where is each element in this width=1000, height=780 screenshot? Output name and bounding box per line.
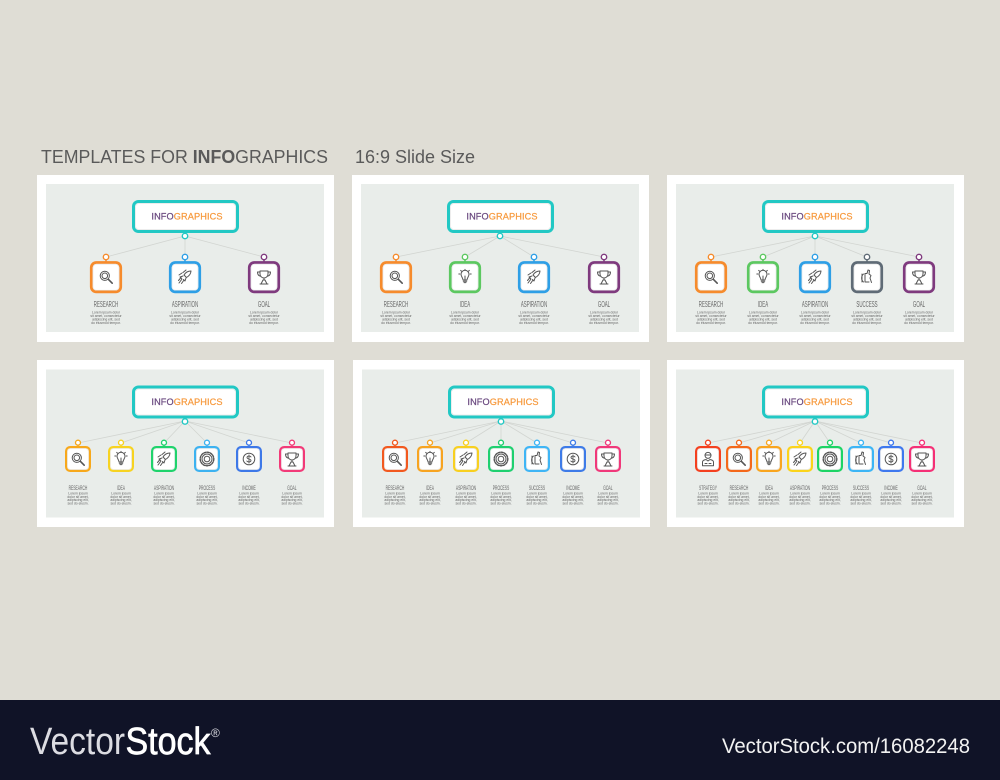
card: research: adipiscing elit, sed bbox=[697, 318, 725, 322]
card: income: dolor sit amet, bbox=[238, 495, 260, 499]
footer bar bbox=[0, 700, 1000, 780]
card: process: adipiscing elit, bbox=[490, 498, 512, 502]
card: goal: do eiusmod tempor. bbox=[589, 321, 619, 325]
card: success: adipiscing elit, bbox=[850, 498, 872, 502]
card: research: do eiusmod tempor. bbox=[91, 321, 121, 325]
card: goal: GOAL bbox=[598, 301, 610, 309]
card: success: do eiusmod tempor. bbox=[852, 321, 882, 325]
card: goal: Lorem ipsum dolor bbox=[590, 310, 619, 314]
card: aspiration: Lorem ipsum bbox=[154, 492, 174, 496]
card: idea: adipiscing elit, sed bbox=[451, 318, 479, 322]
card: process bbox=[818, 440, 842, 505]
card: aspiration: dolor sit amet, bbox=[455, 495, 477, 499]
card: aspiration: sed do eiusm. bbox=[153, 501, 175, 505]
card: research: sed do eiusm. bbox=[67, 501, 89, 505]
hub node bbox=[812, 233, 818, 239]
card: idea: do eiusmod tempor. bbox=[450, 321, 480, 325]
card: idea: sit amet, consectetur bbox=[747, 314, 780, 318]
hub node bbox=[498, 419, 504, 424]
card: idea: adipiscing elit, sed bbox=[749, 318, 777, 322]
panel: seven items bbox=[353, 360, 650, 527]
card: aspiration: adipiscing elit, bbox=[455, 498, 477, 502]
card: process: PROCESS bbox=[493, 485, 510, 493]
card: aspiration bbox=[799, 254, 832, 325]
card: success: SUCCESS bbox=[856, 301, 878, 309]
card: success: Lorem ipsum bbox=[851, 492, 871, 496]
card: income: Lorem ipsum bbox=[239, 492, 259, 496]
card: goal: GOAL bbox=[258, 301, 270, 309]
card: success: SUCCESS bbox=[853, 485, 870, 493]
card: goal: Lorem ipsum bbox=[912, 492, 932, 496]
card: goal: sit amet, consectetur bbox=[248, 314, 281, 318]
header box: INFOGRAPHICS bbox=[151, 212, 223, 222]
card: research: do eiusmod tempor. bbox=[696, 321, 726, 325]
panel: three items bbox=[37, 175, 334, 342]
card: aspiration bbox=[169, 254, 202, 325]
card: goal: Lorem ipsum bbox=[282, 492, 302, 496]
card: process: Lorem ipsum bbox=[820, 492, 840, 496]
card: process: sed do eiusm. bbox=[196, 501, 218, 505]
card: aspiration: adipiscing elit, sed bbox=[801, 318, 829, 322]
hub node bbox=[812, 419, 818, 424]
card: idea: adipiscing elit, bbox=[419, 498, 441, 502]
card: idea bbox=[109, 440, 133, 505]
card: research: sit amet, consectetur bbox=[90, 314, 123, 318]
card: idea: sed do eiusm. bbox=[758, 501, 780, 505]
card: income: dolor sit amet, bbox=[562, 495, 584, 499]
card: success bbox=[849, 440, 873, 505]
card: idea: IDEA bbox=[117, 485, 125, 493]
card: goal: GOAL bbox=[603, 485, 613, 493]
card: idea: do eiusmod tempor. bbox=[748, 321, 778, 325]
card: strategy: dolor sit amet, bbox=[697, 495, 719, 499]
card: research: RESEARCH bbox=[94, 301, 118, 309]
card: process: dolor sit amet, bbox=[490, 495, 512, 499]
card: aspiration bbox=[454, 440, 478, 505]
footer id text: VectorStock.com/16082248 bbox=[722, 735, 970, 758]
card: process bbox=[195, 440, 219, 505]
header box bbox=[764, 387, 868, 417]
card: idea: adipiscing elit, bbox=[110, 498, 132, 502]
card: goal: dolor sit amet, bbox=[597, 495, 619, 499]
card: idea: sed do eiusm. bbox=[419, 501, 441, 505]
card: success bbox=[525, 440, 549, 505]
hub node bbox=[182, 419, 188, 424]
card: income: sed do eiusm. bbox=[238, 501, 260, 505]
card: aspiration: sit amet, consectetur bbox=[518, 314, 551, 318]
card: income: INCOME bbox=[566, 485, 580, 493]
card: success: adipiscing elit, sed bbox=[853, 318, 881, 322]
card: idea bbox=[747, 254, 780, 325]
card: strategy bbox=[696, 440, 720, 505]
card: process bbox=[489, 440, 513, 505]
title: templates for infographics: TEMPLATES FOR INFOGRAPHICS bbox=[41, 146, 328, 167]
card: goal: do eiusmod tempor. bbox=[904, 321, 934, 325]
panel: eight items bbox=[667, 360, 964, 527]
card: strategy: STRATEGY bbox=[699, 485, 717, 493]
card: research bbox=[66, 440, 90, 505]
card: goal: sed do eiusm. bbox=[281, 501, 303, 505]
card: idea: Lorem ipsum dolor bbox=[749, 310, 778, 314]
card: aspiration: sit amet, consectetur bbox=[799, 314, 832, 318]
card: success: sed do eiusm. bbox=[526, 501, 548, 505]
card: income: Lorem ipsum bbox=[563, 492, 583, 496]
card: aspiration bbox=[152, 440, 176, 505]
card: research: Lorem ipsum dolor bbox=[697, 310, 726, 314]
card: aspiration: do eiusmod tempor. bbox=[170, 321, 200, 325]
card: research: RESEARCH bbox=[384, 301, 408, 309]
card: process: dolor sit amet, bbox=[196, 495, 218, 499]
panel: six items bbox=[37, 360, 334, 527]
card: research bbox=[380, 254, 413, 325]
card: aspiration: ASPIRATION bbox=[154, 485, 174, 493]
card: strategy: sed do eiusm. bbox=[697, 501, 719, 505]
card: income: adipiscing elit, bbox=[880, 498, 902, 502]
card: aspiration: ASPIRATION bbox=[521, 301, 547, 309]
card: research: dolor sit amet, bbox=[67, 495, 89, 499]
logo: VectorStock: Vector bbox=[30, 721, 125, 763]
card: process: adipiscing elit, bbox=[819, 498, 841, 502]
card: success: sit amet, consectetur bbox=[851, 314, 884, 318]
card: goal: adipiscing elit, bbox=[597, 498, 619, 502]
card: success bbox=[851, 254, 884, 325]
card: research: do eiusmod tempor. bbox=[381, 321, 411, 325]
card: process: Lorem ipsum bbox=[197, 492, 217, 496]
card: goal bbox=[596, 440, 620, 505]
card: process: sed do eiusm. bbox=[819, 501, 841, 505]
card: income: sed do eiusm. bbox=[880, 501, 902, 505]
card: success: adipiscing elit, bbox=[526, 498, 548, 502]
card: idea: sit amet, consectetur bbox=[449, 314, 482, 318]
logo: VectorStock: ® bbox=[211, 726, 220, 740]
card: aspiration: Lorem ipsum dolor bbox=[171, 310, 200, 314]
card: idea bbox=[449, 254, 482, 325]
card: research: adipiscing elit, bbox=[67, 498, 89, 502]
card: goal: do eiusmod tempor. bbox=[249, 321, 279, 325]
card: success: Lorem ipsum dolor bbox=[853, 310, 882, 314]
card: research: RESEARCH bbox=[699, 301, 723, 309]
card: goal: sed do eiusm. bbox=[597, 501, 619, 505]
card: research: sit amet, consectetur bbox=[695, 314, 728, 318]
card: idea: dolor sit amet, bbox=[110, 495, 132, 499]
card: aspiration: ASPIRATION bbox=[172, 301, 198, 309]
card: process: sed do eiusm. bbox=[490, 501, 512, 505]
panel: four items bbox=[352, 175, 649, 342]
header box: INFOGRAPHICS bbox=[466, 212, 538, 222]
card: income: Lorem ipsum bbox=[881, 492, 901, 496]
card: aspiration: ASPIRATION bbox=[802, 301, 828, 309]
card: idea: sed do eiusm. bbox=[110, 501, 132, 505]
card: idea bbox=[757, 440, 781, 505]
card: income bbox=[237, 440, 261, 505]
card: success: dolor sit amet, bbox=[526, 495, 548, 499]
header box bbox=[134, 387, 238, 417]
card: goal: sit amet, consectetur bbox=[588, 314, 621, 318]
card: idea: IDEA bbox=[765, 485, 773, 493]
panel: five items bbox=[667, 175, 964, 342]
card: research: adipiscing elit, sed bbox=[382, 318, 410, 322]
hub node bbox=[497, 233, 503, 239]
card: research: RESEARCH bbox=[730, 485, 749, 493]
card: income: adipiscing elit, bbox=[238, 498, 260, 502]
header box: INFOGRAPHICS bbox=[151, 397, 223, 407]
card: idea: IDEA bbox=[758, 301, 769, 309]
card: research: Lorem ipsum dolor bbox=[382, 310, 411, 314]
card: research: dolor sit amet, bbox=[728, 495, 750, 499]
card: aspiration: sed do eiusm. bbox=[455, 501, 477, 505]
card: process: adipiscing elit, bbox=[196, 498, 218, 502]
header box bbox=[764, 202, 868, 232]
card: idea: Lorem ipsum bbox=[420, 492, 440, 496]
header box bbox=[448, 202, 552, 232]
card: goal bbox=[588, 254, 621, 325]
card: idea: dolor sit amet, bbox=[758, 495, 780, 499]
card: research: Lorem ipsum bbox=[385, 492, 405, 496]
header box bbox=[134, 202, 238, 232]
card: aspiration: Lorem ipsum dolor bbox=[520, 310, 549, 314]
card: goal: Lorem ipsum bbox=[598, 492, 618, 496]
card: goal: adipiscing elit, sed bbox=[590, 318, 618, 322]
card: goal: GOAL bbox=[287, 485, 297, 493]
header box: INFOGRAPHICS bbox=[467, 397, 539, 407]
card: goal: dolor sit amet, bbox=[911, 495, 933, 499]
card: research: Lorem ipsum dolor bbox=[92, 310, 121, 314]
card: research: dolor sit amet, bbox=[384, 495, 406, 499]
card: aspiration: Lorem ipsum dolor bbox=[801, 310, 830, 314]
card: strategy: adipiscing elit, bbox=[697, 498, 719, 502]
card: goal: Lorem ipsum dolor bbox=[250, 310, 279, 314]
card: aspiration: adipiscing elit, bbox=[153, 498, 175, 502]
card: goal bbox=[280, 440, 304, 505]
card: income: sed do eiusm. bbox=[562, 501, 584, 505]
card: income: adipiscing elit, bbox=[562, 498, 584, 502]
card: idea: IDEA bbox=[426, 485, 434, 493]
card: goal bbox=[910, 440, 934, 505]
card: research bbox=[383, 440, 407, 505]
card: research: sed do eiusm. bbox=[384, 501, 406, 505]
card: aspiration: Lorem ipsum bbox=[456, 492, 476, 496]
card: goal: GOAL bbox=[917, 485, 927, 493]
card: idea: Lorem ipsum bbox=[759, 492, 779, 496]
card: aspiration: do eiusmod tempor. bbox=[519, 321, 549, 325]
card: success: sed do eiusm. bbox=[850, 501, 872, 505]
card: goal: GOAL bbox=[913, 301, 925, 309]
subtitle: slide size: 16:9 Slide Size bbox=[355, 146, 475, 167]
card: goal: adipiscing elit, bbox=[911, 498, 933, 502]
card: idea: IDEA bbox=[460, 301, 471, 309]
card: goal: adipiscing elit, sed bbox=[250, 318, 278, 322]
logo: VectorStock bbox=[30, 721, 220, 763]
card: process: Lorem ipsum bbox=[491, 492, 511, 496]
card: aspiration: Lorem ipsum bbox=[790, 492, 810, 496]
card: aspiration: adipiscing elit, sed bbox=[171, 318, 199, 322]
card: success: Lorem ipsum bbox=[527, 492, 547, 496]
card: aspiration: sit amet, consectetur bbox=[169, 314, 202, 318]
card: idea: dolor sit amet, bbox=[419, 495, 441, 499]
card: aspiration bbox=[788, 440, 812, 505]
card: income bbox=[561, 440, 585, 505]
hub node bbox=[182, 233, 188, 239]
card: aspiration bbox=[518, 254, 551, 325]
card: income: INCOME bbox=[884, 485, 898, 493]
card: idea: Lorem ipsum dolor bbox=[451, 310, 480, 314]
header box bbox=[450, 387, 554, 417]
card: aspiration: ASPIRATION bbox=[790, 485, 810, 493]
card: research: sed do eiusm. bbox=[728, 501, 750, 505]
card: process: PROCESS bbox=[822, 485, 839, 493]
card: research: Lorem ipsum bbox=[68, 492, 88, 496]
card: goal bbox=[248, 254, 281, 325]
card: success: dolor sit amet, bbox=[850, 495, 872, 499]
header box: INFOGRAPHICS bbox=[781, 212, 853, 222]
card: process: PROCESS bbox=[199, 485, 216, 493]
card: idea: adipiscing elit, bbox=[758, 498, 780, 502]
card: idea bbox=[418, 440, 442, 505]
header box: INFOGRAPHICS bbox=[781, 397, 853, 407]
card: research: RESEARCH bbox=[69, 485, 88, 493]
card: research: RESEARCH bbox=[386, 485, 405, 493]
card: research bbox=[90, 254, 123, 325]
card: income: dolor sit amet, bbox=[880, 495, 902, 499]
card: income: INCOME bbox=[242, 485, 256, 493]
card: goal: Lorem ipsum dolor bbox=[905, 310, 934, 314]
card: strategy: Lorem ipsum bbox=[698, 492, 718, 496]
card: aspiration: dolor sit amet, bbox=[789, 495, 811, 499]
card: research: Lorem ipsum bbox=[729, 492, 749, 496]
card: idea: Lorem ipsum bbox=[111, 492, 131, 496]
card: aspiration: dolor sit amet, bbox=[153, 495, 175, 499]
card: aspiration: sed do eiusm. bbox=[789, 501, 811, 505]
card: research bbox=[727, 440, 751, 505]
card: research bbox=[695, 254, 728, 325]
card: income bbox=[879, 440, 903, 505]
card: research: adipiscing elit, bbox=[384, 498, 406, 502]
card: goal: adipiscing elit, bbox=[281, 498, 303, 502]
card: success: SUCCESS bbox=[529, 485, 546, 493]
logo: VectorStock: Stock bbox=[126, 721, 211, 763]
card: goal: dolor sit amet, bbox=[281, 495, 303, 499]
card: aspiration: adipiscing elit, sed bbox=[520, 318, 548, 322]
card: research: sit amet, consectetur bbox=[380, 314, 413, 318]
card: aspiration: do eiusmod tempor. bbox=[800, 321, 830, 325]
card: aspiration: adipiscing elit, bbox=[789, 498, 811, 502]
card: aspiration: ASPIRATION bbox=[456, 485, 476, 493]
card: research: adipiscing elit, bbox=[728, 498, 750, 502]
card: goal bbox=[903, 254, 936, 325]
card: goal: sed do eiusm. bbox=[911, 501, 933, 505]
card: research: adipiscing elit, sed bbox=[92, 318, 120, 322]
card: process: dolor sit amet, bbox=[819, 495, 841, 499]
card: goal: sit amet, consectetur bbox=[903, 314, 936, 318]
card: goal: adipiscing elit, sed bbox=[905, 318, 933, 322]
